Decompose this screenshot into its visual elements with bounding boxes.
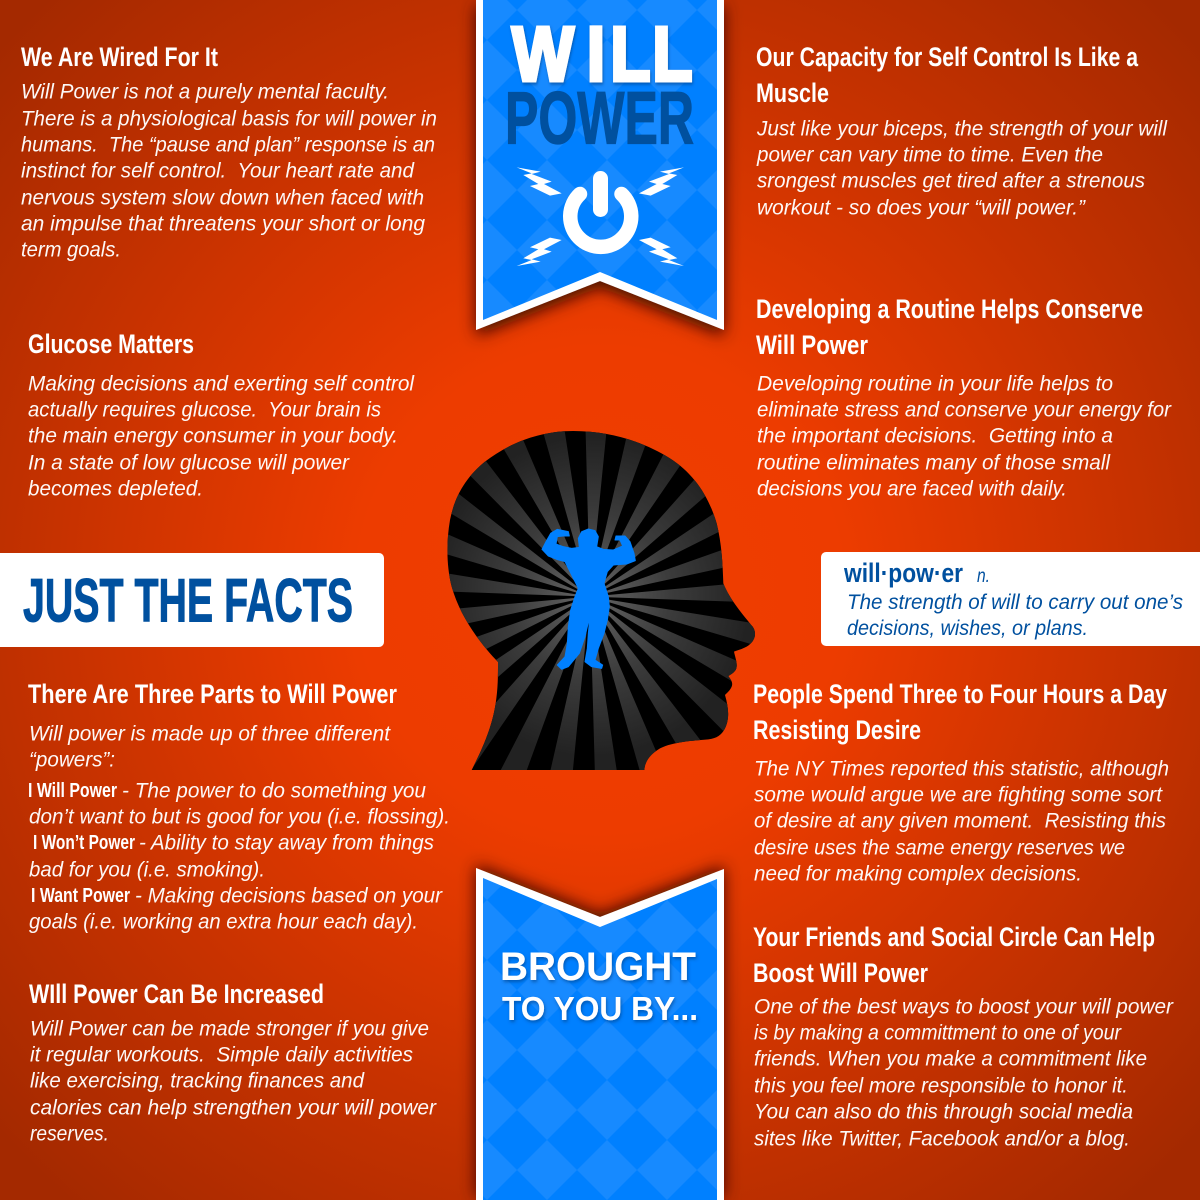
- body text: it regular workouts. Simple daily activities: [30, 1043, 413, 1066]
- body text: sites like Twitter, Facebook and/or a blog.: [754, 1127, 1130, 1150]
- title: will: WILL: [512, 12, 692, 98]
- definition box: willpower: [821, 552, 1200, 646]
- illustration: head silhouette with muscleman: [447, 431, 756, 770]
- body text: [28, 722, 450, 933]
- body text: humans. The “pause and plan” response is an: [21, 133, 435, 156]
- definition text: [847, 591, 1183, 640]
- body text: The NY Times reported this statistic, although: [754, 757, 1169, 780]
- heading: Boost Will Power: [753, 958, 928, 988]
- body text: - Making decisions based on your: [135, 884, 443, 907]
- panel: we are wired for it: [21, 42, 437, 261]
- body text: [756, 117, 1168, 219]
- body text: this you feel more responsible to honor it.: [754, 1074, 1128, 1097]
- body text: I Won’t Power: [33, 832, 135, 854]
- body text: like exercising, tracking finances and: [30, 1069, 365, 1092]
- panel: resisting desire: [753, 679, 1169, 885]
- body text: term goals.: [21, 238, 121, 261]
- body text: [21, 80, 437, 261]
- body text: actually requires glucose. Your brain is: [28, 398, 381, 421]
- icon: power button with lightning bolts: [517, 167, 684, 266]
- heading: WIll Power Can Be Increased: [29, 979, 324, 1009]
- bottom ribbon: brought to you by: [476, 868, 724, 1200]
- body text: Developing routine in your life helps to: [757, 372, 1113, 395]
- icon: muscleman: [542, 529, 635, 669]
- banner text: JUST THE FACTS: [23, 566, 353, 634]
- body text: nervous system slow down when faced with: [21, 186, 424, 209]
- body text: I Want Power: [31, 885, 130, 907]
- body text: decisions you are faced with daily.: [757, 477, 1067, 500]
- heading: There Are Three Parts to Will Power: [28, 679, 397, 709]
- body text: Will Power is not a purely mental faculty.: [21, 80, 389, 103]
- body text: routine eliminates many of those small: [757, 451, 1111, 474]
- heading: Will Power: [756, 330, 868, 360]
- heading: We Are Wired For It: [21, 42, 218, 72]
- body text: some would argue we are fighting some sort: [754, 783, 1163, 806]
- ribbon subheading: TO YOU BY...: [502, 990, 698, 1027]
- body text: eliminate stress and conserve your energy for: [757, 398, 1172, 421]
- panel: three parts to will power: [28, 679, 450, 933]
- body text: Will Power can be made stronger if you give: [30, 1017, 429, 1040]
- body text: goals (i.e. working an extra hour each day).: [29, 910, 418, 933]
- panel: developing a routine: [756, 294, 1172, 500]
- panel: self control is like a muscle: [756, 42, 1168, 219]
- body text: the main energy consumer in your body.: [28, 424, 398, 447]
- body text: becomes depleted.: [28, 477, 203, 500]
- body text: [757, 372, 1172, 500]
- body text: don’t want to but is good for you (i.e. flossing).: [29, 805, 450, 828]
- heading: Glucose Matters: [28, 329, 194, 359]
- definition text: The strength of will to carry out one’s: [847, 591, 1183, 614]
- heading: [756, 42, 1139, 108]
- body text: need for making complex decisions.: [754, 862, 1082, 885]
- heading: [753, 922, 1155, 988]
- banner: just the facts: [0, 553, 384, 647]
- body text: is by making a committment to one of your: [754, 1021, 1122, 1044]
- body text: One of the best ways to boost your will power: [754, 995, 1174, 1018]
- ribbon heading: BROUGHT: [500, 945, 696, 989]
- part of speech: n.: [977, 566, 990, 587]
- body text: an impulse that threatens your short or long: [21, 212, 425, 235]
- body text: Will power is made up of three different: [29, 722, 391, 745]
- body text: desire uses the same energy reserves we: [754, 836, 1125, 859]
- title: power: POWER: [505, 76, 694, 160]
- panel: friends and social circle: [753, 922, 1174, 1150]
- body text: - The power to do something you: [122, 779, 426, 802]
- body text: reserves.: [30, 1122, 109, 1145]
- body text: workout - so does your “will power.”: [757, 196, 1086, 219]
- panel: glucose matters: [28, 329, 415, 500]
- body text: friends. When you make a commitment like: [754, 1047, 1147, 1070]
- body text: [30, 1017, 437, 1145]
- body text: There is a physiological basis for will power in: [21, 107, 437, 130]
- heading: Muscle: [756, 78, 829, 108]
- heading: [753, 679, 1167, 745]
- body text: [754, 995, 1174, 1150]
- body text: Making decisions and exerting self control: [28, 372, 415, 395]
- body text: power can vary time to time. Even the: [756, 143, 1103, 166]
- body text: the important decisions. Getting into a: [757, 424, 1113, 447]
- definition text: decisions, wishes, or plans.: [847, 617, 1088, 640]
- body text: bad for you (i.e. smoking).: [29, 858, 265, 881]
- body text: of desire at any given moment. Resisting this: [754, 809, 1166, 832]
- body text: [28, 372, 415, 500]
- body text: srongest muscles get tired after a strenous: [757, 169, 1145, 192]
- body text: calories can help strengthen your will power: [30, 1096, 437, 1119]
- top ribbon: will power title: [476, 0, 724, 330]
- body text: [754, 757, 1169, 885]
- heading: Resisting Desire: [753, 715, 921, 745]
- body text: I Will Power: [28, 780, 117, 802]
- definition word: will·pow·er: [843, 558, 963, 588]
- body text: instinct for self control. Your heart rate and: [21, 159, 415, 182]
- body text: - Ability to stay away from things: [139, 831, 434, 854]
- heading: [756, 294, 1143, 360]
- body text: Just like your biceps, the strength of your will: [756, 117, 1168, 140]
- body text: “powers”:: [29, 748, 115, 771]
- body text: In a state of low glucose will power: [28, 451, 350, 474]
- panel: will power can be increased: [29, 979, 437, 1145]
- body text: You can also do this through social media: [754, 1100, 1133, 1123]
